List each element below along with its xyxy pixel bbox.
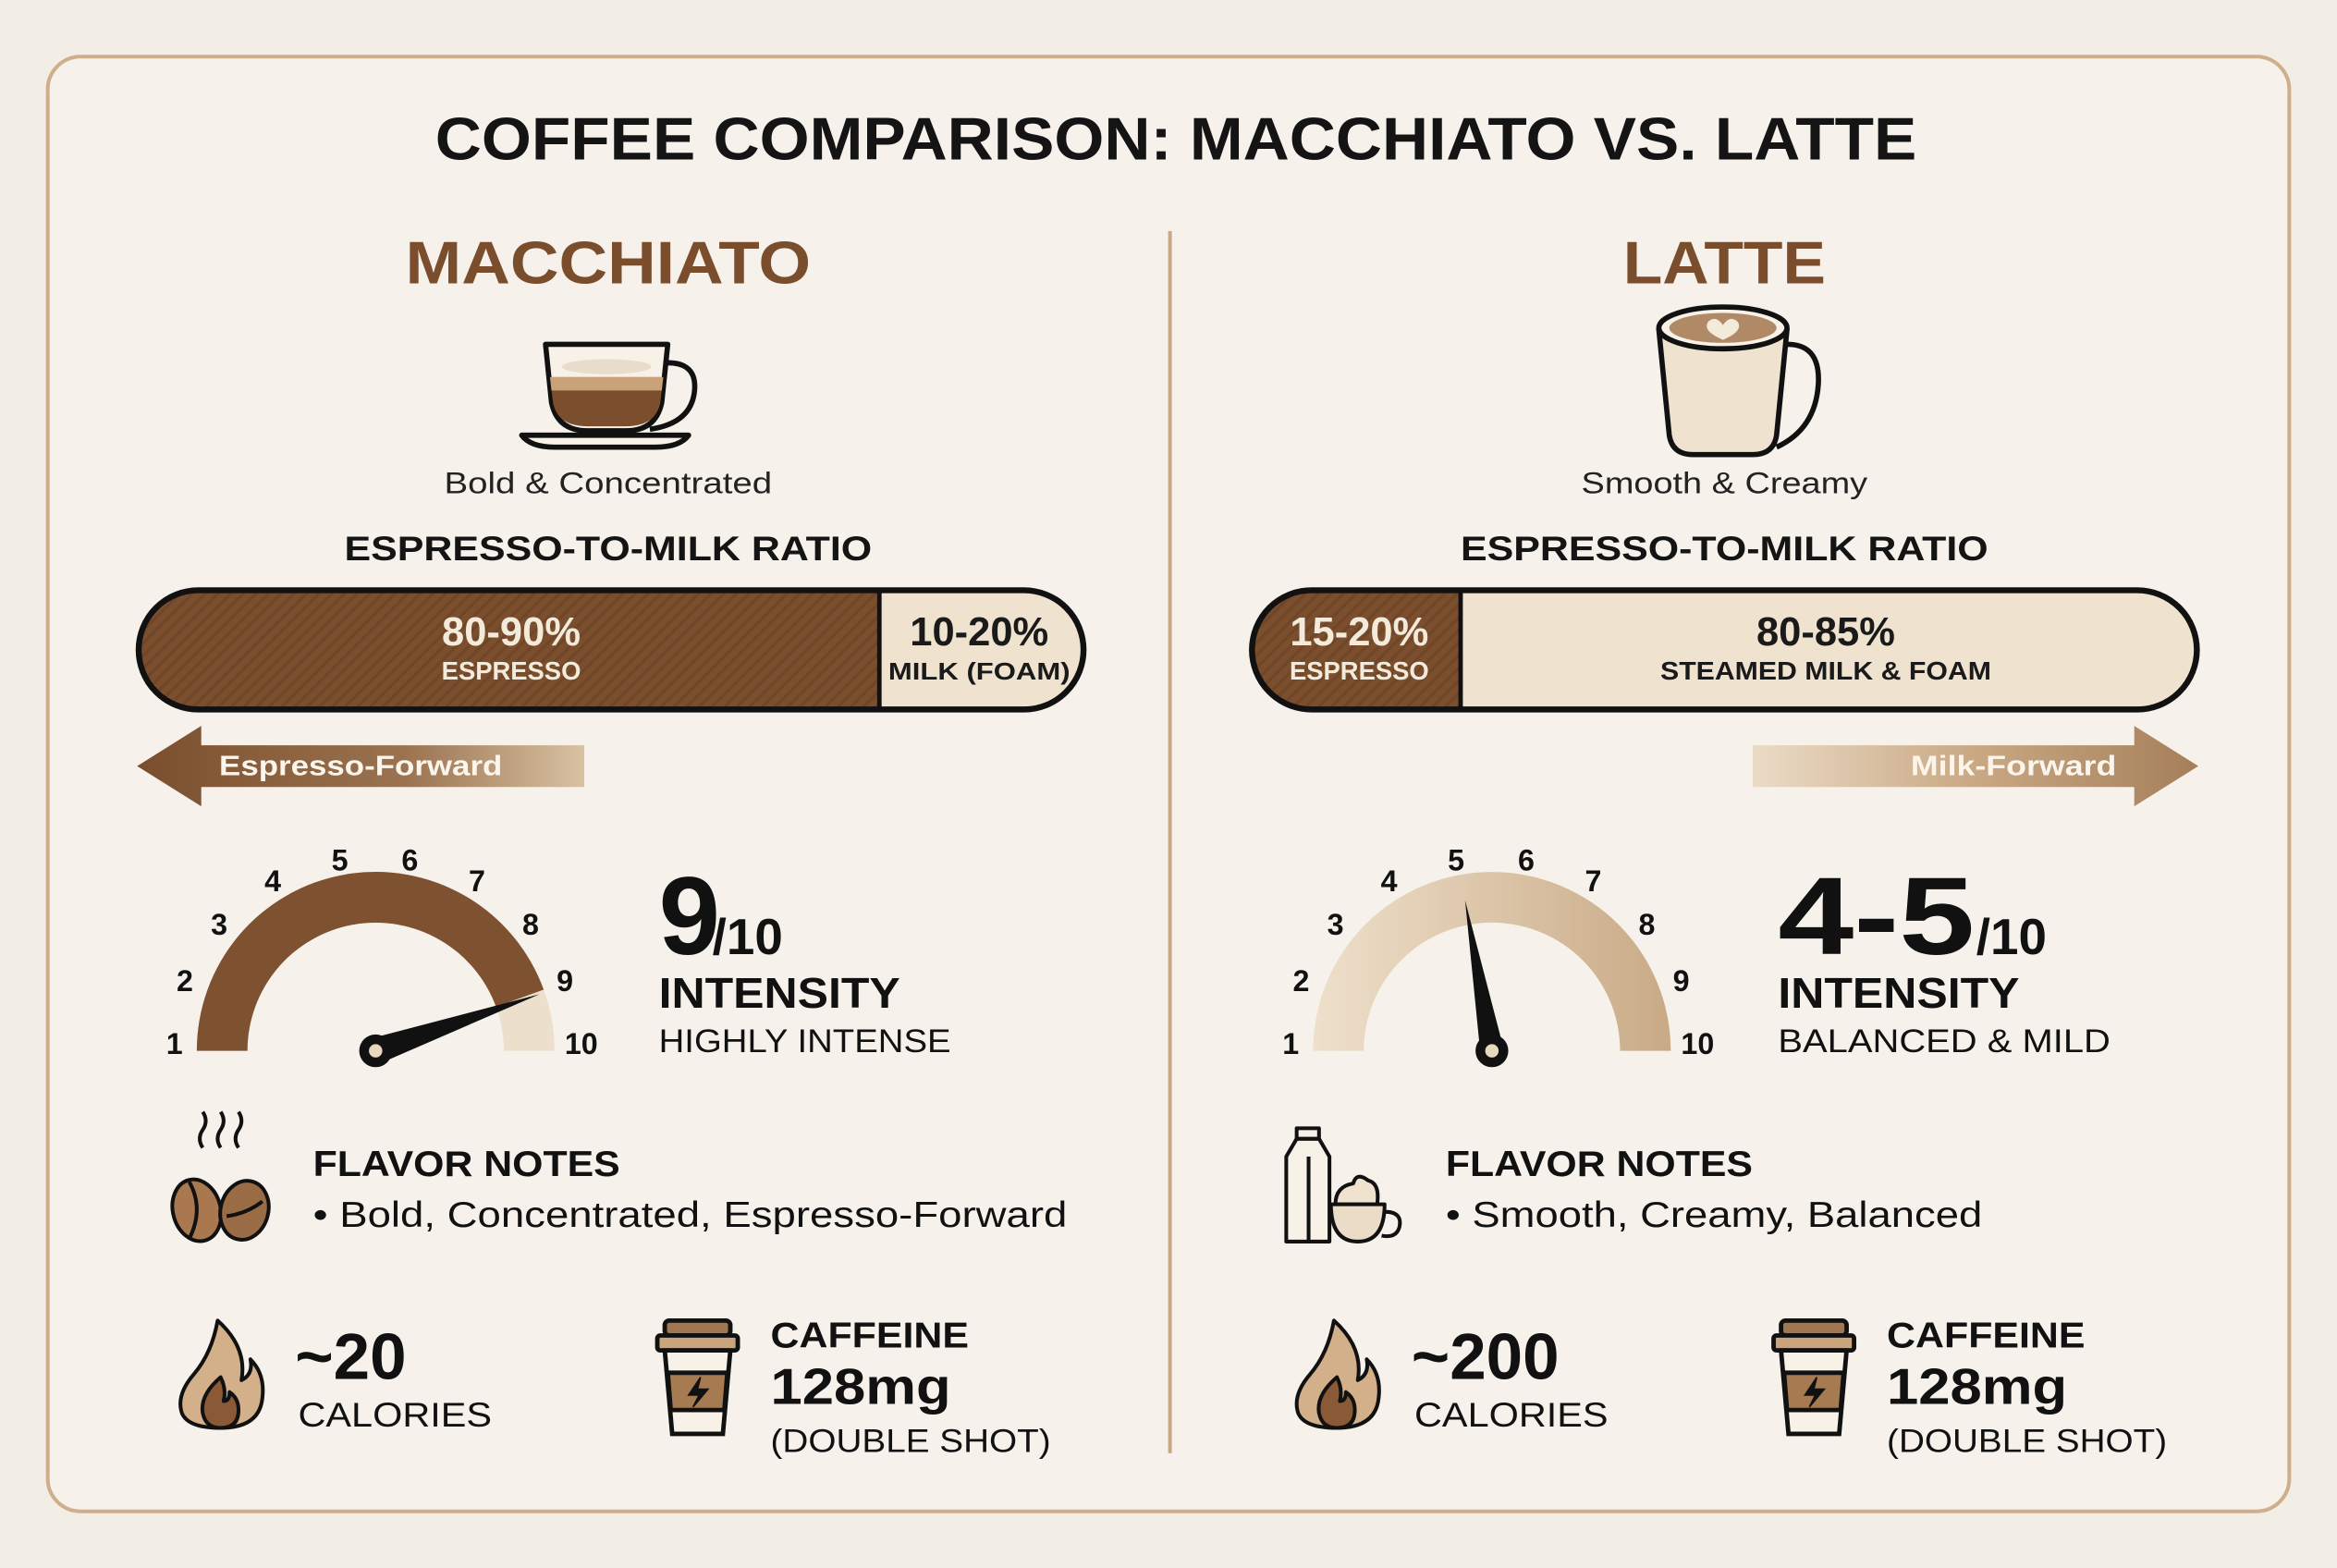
flavor notes <box>313 1145 1067 1235</box>
gauge: latte intensity: 9 <box>1673 964 1690 998</box>
flavor notes: FLAVOR NOTES <box>313 1145 620 1184</box>
ratio bar: 80-90% <box>442 610 581 655</box>
caffeine: CAFFEINE <box>1887 1316 2085 1355</box>
icon: flame <box>180 1320 263 1427</box>
gauge: latte intensity: 3 <box>1328 908 1344 941</box>
arrow: espresso-forward <box>137 726 584 806</box>
intensity score: HIGHLY INTENSE <box>659 1023 951 1060</box>
gauge: macchiato intensity: 7 <box>469 864 485 898</box>
panel: latte <box>1252 229 2198 1459</box>
gauge: macchiato intensity: 1 <box>166 1027 183 1060</box>
tagline: Bold & Concentrated <box>444 467 772 500</box>
calories: ~200 <box>1412 1320 1560 1393</box>
flavor notes: • Smooth, Creamy, Balanced <box>1446 1195 1982 1235</box>
caffeine: CAFFEINE <box>771 1316 969 1355</box>
panel: macchiato <box>137 229 1083 1459</box>
ratio bar: MILK (FOAM) <box>888 659 1071 685</box>
gauge: latte intensity: 8 <box>1639 908 1655 941</box>
intensity score <box>659 855 951 1060</box>
caffeine: (DOUBLE SHOT) <box>1887 1422 2167 1459</box>
ratio bar: STEAMED MILK & FOAM <box>1660 656 1991 685</box>
intensity score: 4-5 <box>1778 855 1975 978</box>
flavor notes <box>1446 1145 1982 1235</box>
icon: coffee beans <box>165 1112 275 1246</box>
intensity score: INTENSITY <box>659 969 900 1017</box>
icon: to-go cup <box>657 1320 738 1434</box>
tagline: Smooth & Creamy <box>1582 467 1868 500</box>
gauge: macchiato intensity: 8 <box>522 908 539 941</box>
icon: macchiato cup <box>521 344 695 447</box>
gauge: macchiato intensity: 5 <box>332 844 349 877</box>
intensity score: INTENSITY <box>1778 969 2020 1017</box>
caffeine: 128mg <box>771 1358 951 1415</box>
gauge: macchiato intensity: 3 <box>211 908 227 941</box>
calories <box>1412 1320 1609 1434</box>
calories <box>295 1320 492 1434</box>
arrow: milk-forward: Milk-Forward <box>1911 750 2116 781</box>
intensity score <box>1778 855 2111 1060</box>
ratio bar: 15-20% <box>1290 610 1428 655</box>
heading: macchiato: MACCHIATO <box>406 229 811 296</box>
ratio bar: 80-85% <box>1756 610 1895 655</box>
gauge: latte intensity: 2 <box>1293 964 1309 998</box>
ratio heading: ESPRESSO-TO-MILK RATIO <box>344 529 872 568</box>
ratio bar: ESPRESSO <box>1290 656 1429 685</box>
gauge: macchiato intensity <box>166 844 598 1067</box>
intensity score: /10 <box>1976 908 2047 965</box>
icon: latte glass <box>1658 307 1818 455</box>
ratio heading: ESPRESSO-TO-MILK RATIO <box>1461 529 1988 568</box>
caffeine <box>771 1316 1051 1459</box>
icon: milk carton and cup <box>1286 1128 1400 1242</box>
gauge: latte intensity <box>1282 844 1714 1067</box>
gauge: macchiato intensity: 6 <box>401 844 418 877</box>
caffeine <box>1887 1316 2167 1459</box>
arrow: milk-forward <box>1753 726 2198 806</box>
caffeine: (DOUBLE SHOT) <box>771 1422 1051 1459</box>
gauge: latte intensity: 1 <box>1282 1027 1299 1060</box>
flavor notes: FLAVOR NOTES <box>1446 1145 1753 1184</box>
calories: ~20 <box>295 1320 407 1393</box>
gauge: latte intensity: 6 <box>1518 844 1535 877</box>
gauge: latte intensity: 5 <box>1448 844 1464 877</box>
calories: CALORIES <box>1414 1395 1609 1434</box>
gauge: latte intensity: 10 <box>1681 1027 1714 1060</box>
ratio bar <box>139 590 1083 709</box>
gauge: latte intensity: 4 <box>1381 864 1398 898</box>
ratio bar <box>1252 590 2196 709</box>
gauge: macchiato intensity: 2 <box>177 964 193 998</box>
intensity score: BALANCED & MILD <box>1778 1023 2111 1060</box>
icon: to-go cup <box>1774 1320 1854 1434</box>
gauge: latte intensity: 7 <box>1585 864 1601 898</box>
ratio bar: ESPRESSO <box>442 656 581 685</box>
calories: CALORIES <box>298 1395 492 1434</box>
arrow: espresso-forward: Espresso-Forward <box>219 750 502 781</box>
heading: latte: LATTE <box>1623 229 1826 296</box>
caffeine: 128mg <box>1887 1358 2067 1415</box>
gauge: macchiato intensity: 10 <box>565 1027 598 1060</box>
gauge: macchiato intensity: 9 <box>557 964 573 998</box>
intensity score: 9 <box>659 855 720 978</box>
icon: flame <box>1297 1320 1379 1427</box>
flavor notes: • Bold, Concentrated, Espresso-Forward <box>313 1195 1067 1235</box>
intensity score: /10 <box>713 908 783 965</box>
ratio bar: 10-20% <box>910 610 1048 655</box>
title: COFFEE COMPARISON: MACCHIATO VS. LATTE <box>435 106 1916 173</box>
gauge: macchiato intensity: 4 <box>264 864 281 898</box>
